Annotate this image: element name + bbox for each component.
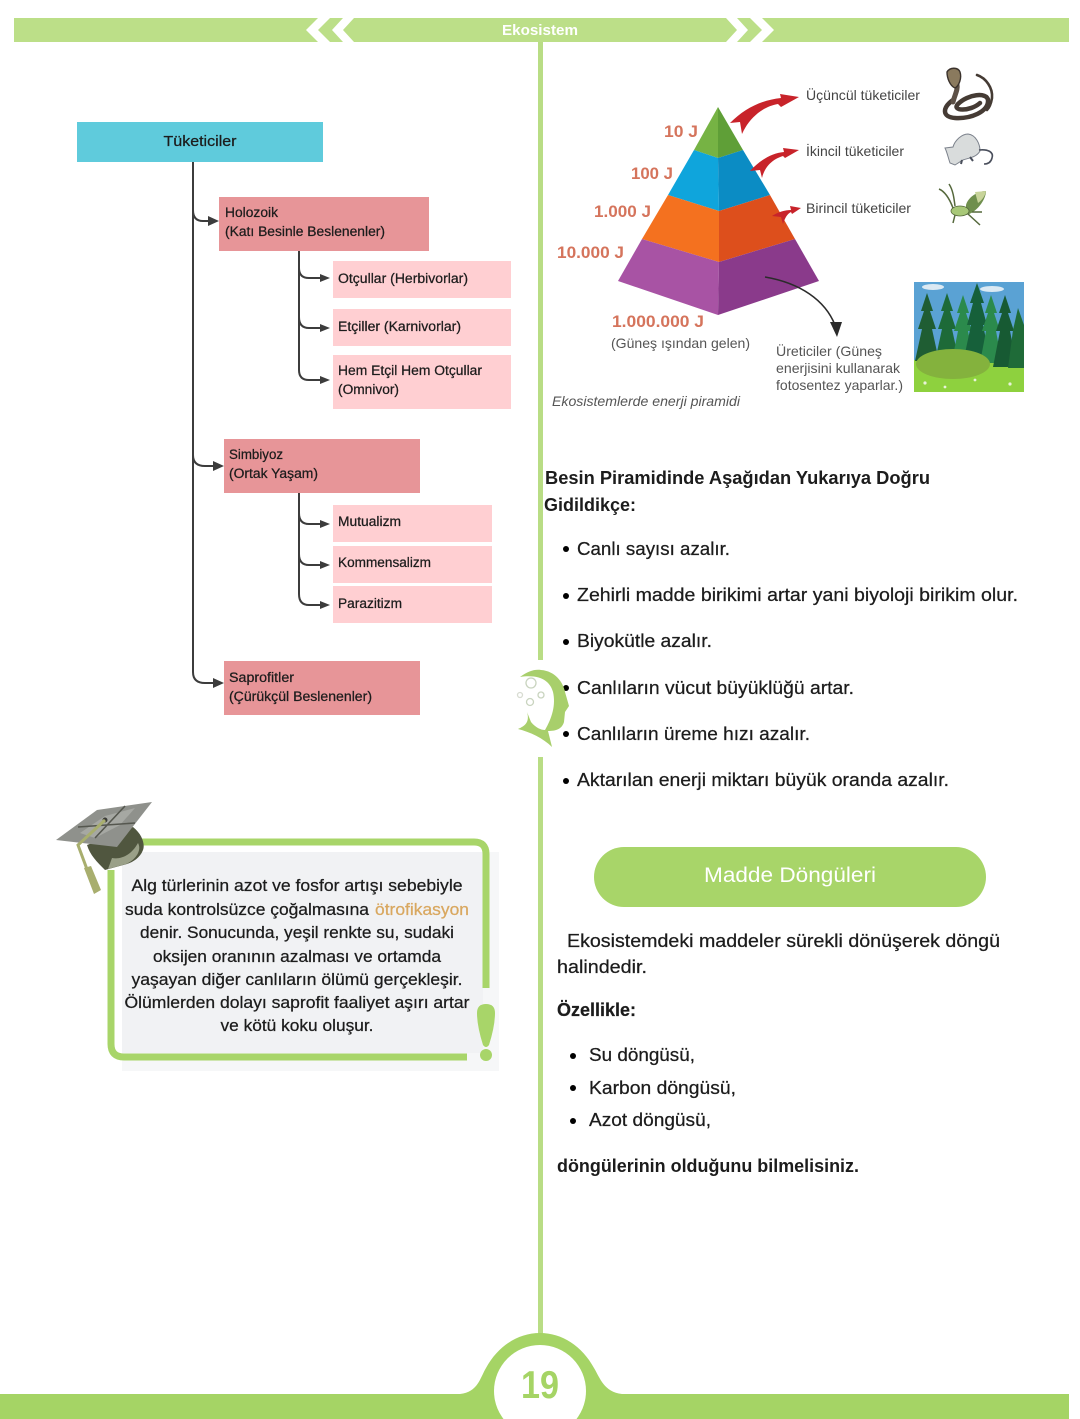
callout text: Alg türlerinin azot ve fosfor artışı sebebiyle xyxy=(132,877,462,895)
panel: consumers tree xyxy=(77,122,511,715)
box: Etçiller xyxy=(333,309,511,346)
header banner xyxy=(14,18,1069,42)
callout text: ötrofikasyon xyxy=(375,901,469,919)
bullet list: pyramid properties: Aktarılan enerji miktarı büyük oranda azalır. xyxy=(577,769,949,790)
callout text: suda kontrolsüzce çoğalmasına xyxy=(125,901,370,919)
closing text: döngülerinin olduğunu bilmelisiniz. xyxy=(557,1155,859,1176)
arrow: producers xyxy=(765,277,842,337)
heading: food pyramid changes: Besin Piramidinde Aşağıdan Yukarıya Doğru xyxy=(545,467,930,488)
callout text: denir. Sonucunda, yeşil renkte su, sudaki xyxy=(140,924,454,942)
tree connectors xyxy=(193,162,330,688)
energy labels: 100 J xyxy=(631,165,673,183)
text block: material cycles intro: Özellikle: xyxy=(557,999,636,1020)
icon: head with bubbles xyxy=(518,660,569,757)
pyramid captions: (Güneş ışından gelen) xyxy=(611,335,750,351)
box: Otçullar: Otçullar (Herbivorlar) xyxy=(338,271,468,286)
bullet list: cycles: Azot döngüsü, xyxy=(589,1109,711,1130)
box: Parazitizm: Parazitizm xyxy=(338,596,402,611)
icon: forest picture xyxy=(914,282,1024,392)
root box: Tüketiciler xyxy=(77,122,323,162)
icon: exclamation mark xyxy=(477,1004,495,1061)
box: Holozoik xyxy=(219,197,429,251)
pyramid layers xyxy=(618,107,819,315)
box: Holozoik: Holozoik xyxy=(225,205,278,220)
box: Saprofitler: (Çürükçül Beslenenler) xyxy=(229,689,372,704)
pyramid captions xyxy=(552,86,920,409)
red arrows xyxy=(730,94,801,224)
energy labels xyxy=(557,123,704,331)
bullet list: pyramid properties: Biyokütle azalır. xyxy=(577,630,712,651)
bullet list: pyramid properties: Zehirli madde birikimi artar yani biyoloji birikim olur. xyxy=(577,584,1018,605)
pyramid captions: enerjisini kullanarak xyxy=(776,360,901,376)
bullet list: pyramid properties: Canlıların vücut büyüklüğü artar. xyxy=(577,677,854,698)
icon: mouse xyxy=(945,134,992,165)
bullet list: cycles: Karbon döngüsü, xyxy=(589,1077,736,1098)
box: Kommensalizm: Kommensalizm xyxy=(338,555,431,570)
icon: cricket xyxy=(939,184,986,225)
header title: Ekosistem xyxy=(502,22,578,39)
bullet list: cycles xyxy=(570,1044,736,1130)
pyramid captions: Üreticiler (Güneş xyxy=(776,342,882,359)
text block: material cycles intro: Ekosistemdeki maddeler sürekli dönüşerek döngü xyxy=(567,930,1000,951)
box: Holozoik: (Katı Besinle Beslenenler) xyxy=(225,224,385,239)
icon: cobra xyxy=(945,68,992,118)
center divider line xyxy=(538,42,543,1342)
energy labels: 10.000 J xyxy=(557,244,624,262)
callout text: ve kötü koku oluşur. xyxy=(220,1017,374,1035)
section header: Madde Döngüleri: Madde Döngüleri xyxy=(704,864,876,887)
bullet list: cycles: Su döngüsü, xyxy=(589,1044,695,1065)
box: Omnivor: (Omnivor) xyxy=(338,382,399,397)
heading: food pyramid changes xyxy=(544,467,930,515)
energy labels: 1.000.000 J xyxy=(612,313,704,331)
box: Saprofitler xyxy=(224,661,420,715)
bullet list: pyramid properties: Canlı sayısı azalır. xyxy=(577,538,730,559)
callout text: Ölümlerden dolayı saprofit faaliyet aşırı artar xyxy=(124,994,470,1012)
bullet list: pyramid properties: Canlıların üreme hızı azalır. xyxy=(577,723,810,744)
heading: food pyramid changes: Gidildikçe: xyxy=(544,494,636,515)
box: Etçiller: Etçiller (Karnivorlar) xyxy=(338,319,461,334)
pyramid captions: fotosentez yaparlar.) xyxy=(776,377,903,393)
box: Parazitizm xyxy=(333,586,492,623)
section header: Madde Döngüleri xyxy=(594,847,986,907)
box: Omnivor xyxy=(333,355,511,409)
box: Saprofitler: Saprofitler xyxy=(229,670,295,685)
panel: energy pyramid xyxy=(552,68,1024,409)
page number: 19 xyxy=(521,1364,559,1407)
energy labels: 10 J xyxy=(664,123,698,141)
bullet list: pyramid properties xyxy=(563,538,1018,790)
pyramid captions: Üçüncül tüketiciler xyxy=(806,86,920,103)
box: Simbiyoz: (Ortak Yaşam) xyxy=(229,466,318,481)
box: Simbiyoz xyxy=(224,439,420,493)
pyramid captions: İkincil tüketiciler xyxy=(806,142,904,159)
text block: material cycles intro xyxy=(557,930,1000,1020)
box: Omnivor: Hem Etçil Hem Otçullar xyxy=(338,363,483,378)
pyramid captions: Ekosistemlerde enerji piramidi xyxy=(552,393,741,409)
box: Otçullar xyxy=(333,261,511,298)
callout text: oksijen oranının azalması ve ortamda xyxy=(153,948,442,966)
text block: material cycles intro: halindedir. xyxy=(557,956,647,977)
root box: Tüketiciler: Tüketiciler xyxy=(164,133,236,150)
box: Simbiyoz: Simbiyoz xyxy=(229,447,283,462)
callout text: yaşayan diğer canlıların ölümü gerçekleşir. xyxy=(132,971,462,989)
box: Mutualizm: Mutualizm xyxy=(338,514,401,529)
energy labels: 1.000 J xyxy=(594,203,651,221)
callout: ötrofikasyon note xyxy=(111,842,499,1071)
box: Mutualizm xyxy=(333,505,492,542)
pyramid captions: Birincil tüketiciler xyxy=(806,200,911,216)
callout text xyxy=(124,877,470,1035)
footer bar with page number xyxy=(0,1333,1069,1419)
box: Kommensalizm xyxy=(333,546,492,583)
icon: graduation cap xyxy=(56,802,152,894)
